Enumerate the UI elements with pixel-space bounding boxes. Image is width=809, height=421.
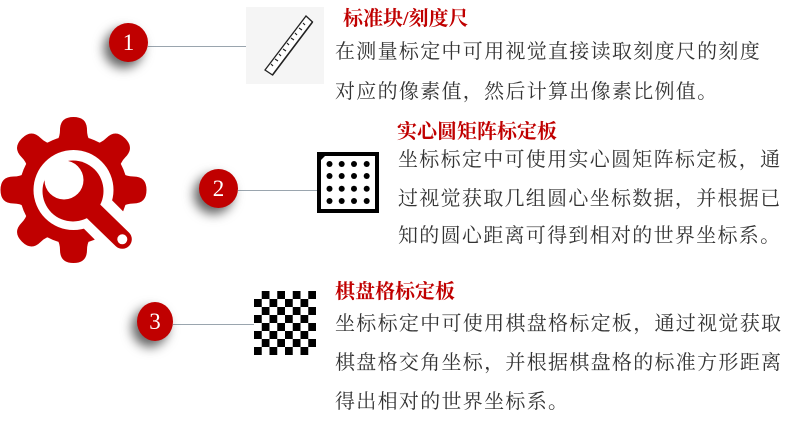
text: ruler description: 在测量标定中可用视觉直接读取刻度尺的刻度	[335, 41, 761, 63]
text: checkerboard description: 得出相对的世界坐标系。	[335, 391, 569, 413]
text: checkerboard description	[335, 312, 782, 413]
connector line 3	[173, 324, 254, 325]
icon: gear with wrench	[0, 117, 146, 263]
text: checkerboard description: 棋盘格交角坐标，并根据棋盘格的标准方形距离	[335, 352, 782, 374]
number badge 2	[199, 169, 238, 208]
text: checkerboard description: 坐标标定中可使用棋盘格标定板，通过视觉获取	[335, 313, 782, 335]
text: circle grid description: 过视觉获取几组圆心坐标数据，并根据已	[398, 188, 781, 210]
heading: circle grid board: 实心圆矩阵标定板	[397, 121, 557, 143]
number badge 2: 2	[213, 176, 224, 201]
icon: solid circle grid board	[317, 152, 379, 213]
icon: ruler on grey tile	[246, 7, 324, 84]
number badge 3: 3	[149, 309, 161, 334]
heading: checkerboard: 棋盘格标定板	[335, 281, 455, 303]
connector line 1	[148, 46, 246, 47]
text: circle grid description	[398, 148, 781, 247]
number badge 1: 1	[123, 30, 134, 55]
icon: checkerboard	[254, 291, 316, 355]
text: circle grid description: 知的圆心距离可得到相对的世界坐标系。	[398, 225, 781, 247]
heading: ruler: 标准块/刻度尺	[343, 8, 469, 30]
text: ruler description: 对应的像素值，然后计算出像素比例值。	[335, 81, 718, 103]
text: circle grid description: 坐标标定中可使用实心圆矩阵标定板，通	[398, 149, 781, 171]
connector line 2	[238, 190, 317, 191]
number badge 1	[109, 23, 148, 62]
number badge 3	[137, 302, 173, 341]
text: ruler description	[335, 40, 761, 103]
